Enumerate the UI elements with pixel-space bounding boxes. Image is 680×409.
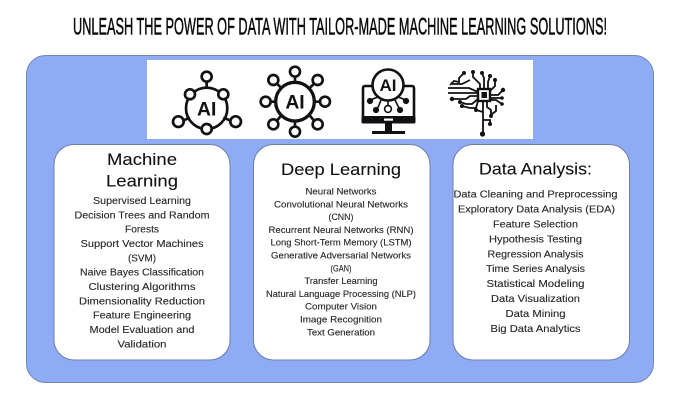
panel: deep learning <box>254 144 430 360</box>
list: data analysis topics: Data Mining <box>506 308 566 320</box>
list: machine learning topics: Decision Trees and Random <box>74 210 210 221</box>
list: data analysis topics: Data Cleaning and Preprocessing <box>454 189 618 201</box>
list: data analysis topics: Regression Analysis <box>488 248 584 260</box>
list: data analysis topics: Data Visualization <box>491 293 580 305</box>
heading: machine learning: Machine <box>107 150 177 169</box>
list: machine learning topics: (SVM) <box>128 253 156 264</box>
list: machine learning topics: Support Vector Machines <box>80 239 204 250</box>
icon: AI monitor <box>362 70 416 134</box>
icon strip <box>147 60 533 139</box>
list: machine learning topics: Feature Engineering <box>93 311 191 322</box>
list: machine learning topics: Model Evaluation and <box>90 325 194 336</box>
list: data analysis topics: Feature Selection <box>493 218 578 230</box>
list: deep learning topics: (GAN) <box>330 263 352 273</box>
list: data analysis topics <box>454 189 618 335</box>
list: deep learning topics: Transfer Learning <box>304 276 378 286</box>
list: deep learning topics: Neural Networks <box>306 186 377 196</box>
blue background panel <box>26 56 654 382</box>
list: machine learning topics: Dimensionality Reduction <box>79 296 205 307</box>
list: deep learning topics: Computer Vision <box>305 302 377 312</box>
list: deep learning topics: Text Generation <box>307 327 375 337</box>
list: deep learning topics: Generative Adversarial Networks <box>271 250 412 260</box>
panel: data analysis <box>453 144 630 360</box>
list: machine learning topics: Naive Bayes Classification <box>80 268 204 279</box>
list: data analysis topics: Exploratory Data Analysis (EDA) <box>458 204 615 216</box>
list: deep learning topics <box>266 186 416 337</box>
heading: machine learning <box>106 150 178 190</box>
list: deep learning topics: (CNN) <box>328 212 354 222</box>
list: data analysis topics: Time Series Analysis <box>486 263 585 275</box>
icon: AI network one: AI <box>197 100 216 121</box>
list: machine learning topics: Supervised Learning <box>93 196 191 207</box>
icon: circuit brain <box>448 70 505 137</box>
list: machine learning topics: Validation <box>118 339 166 350</box>
list: data analysis topics: Hypothesis Testing <box>489 233 582 245</box>
list: data analysis topics: Big Data Analytics <box>490 323 580 335</box>
icon: AI network one <box>173 72 241 134</box>
list: deep learning topics: Natural Language Processing (NLP) <box>266 289 416 299</box>
list: deep learning topics: Recurrent Neural Networks (RNN) <box>268 225 414 235</box>
heading: deep learning: Deep Learning <box>281 160 401 179</box>
list: machine learning topics: Forests <box>125 225 159 236</box>
list: machine learning topics: Clustering Algorithms <box>88 282 196 293</box>
icon: AI network two <box>261 67 330 137</box>
icon: AI network two: AI <box>285 93 305 114</box>
list: machine learning topics <box>74 196 210 350</box>
list: deep learning topics: Image Recognition <box>300 314 382 324</box>
list: data analysis topics: Statistical Modeling <box>486 278 585 290</box>
panel: machine learning <box>54 144 230 360</box>
list: deep learning topics: Long Short-Term Memory (LSTM) <box>270 238 412 248</box>
list: deep learning topics: Convolutional Neural Networks <box>274 199 409 209</box>
heading: data analysis: Data Analysis: <box>479 160 592 178</box>
icon: AI monitor: AI <box>380 76 396 95</box>
heading: machine learning: Learning <box>106 172 178 190</box>
